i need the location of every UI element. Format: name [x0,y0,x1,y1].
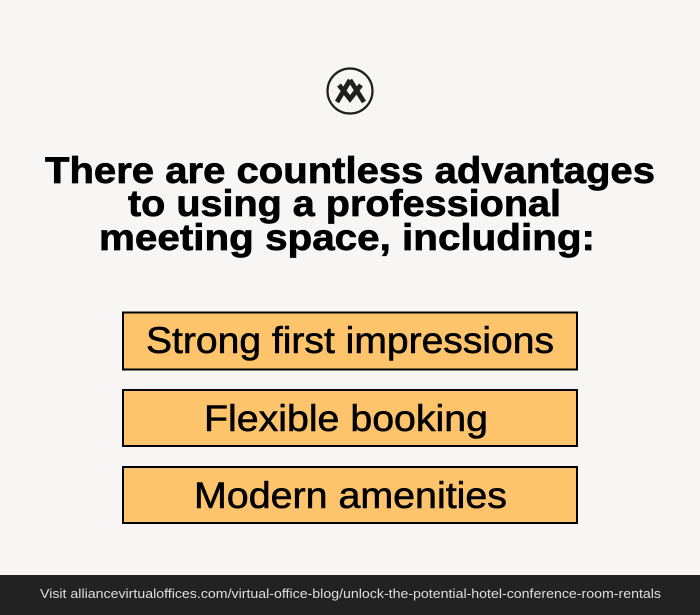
panel: modern amenities: Modern amenities [194,475,507,516]
footer bar: Visit alliancevirtualoffices.com/virtual-office-blog/unlock-the-potential-hotel-conference-room-rentals [40,587,661,601]
icon: mountain logo [328,68,372,114]
footer bar [0,575,700,615]
panel: modern amenities [123,467,577,523]
panel: strong first impressions [123,312,577,370]
title: There are countless advantages [45,150,655,191]
title: meeting space, including: [99,217,595,258]
panel: strong first impressions: Strong first impressions [146,320,554,361]
panel: flexible booking: Flexible booking [204,398,488,439]
panel: flexible booking [123,390,577,446]
title [45,150,655,258]
title: to using a professional [128,183,561,224]
